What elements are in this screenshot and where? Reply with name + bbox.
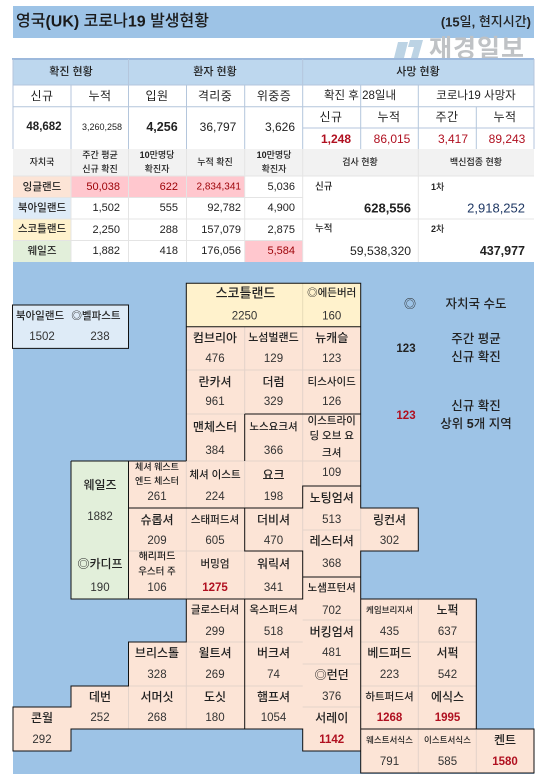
table body: case figures: 누적 <box>89 89 111 103</box>
regional table rows: 2,875 <box>267 224 295 236</box>
regional table rows: 59,538,320 <box>350 244 411 258</box>
table header: group titles <box>12 58 534 85</box>
regional table rows <box>13 176 525 262</box>
panel: Wales: ◎카디프 <box>77 557 123 571</box>
regional table rows: 418 <box>160 245 178 257</box>
map: UK tile cartogram <box>12 283 534 773</box>
region tiles: south: 299 <box>205 626 225 638</box>
region tiles: south: 791 <box>380 756 399 768</box>
table body: case figures: 36,797 <box>200 120 237 134</box>
region tiles: midlands: 링컨셔 <box>373 513 406 527</box>
regional table header: 검사 현황 <box>342 156 378 167</box>
tile outlines <box>12 283 534 773</box>
regional table rows: 622 <box>160 181 178 193</box>
panel: Scotland: 160 <box>322 310 341 322</box>
regional table rows: 2,918,252 <box>467 200 525 216</box>
region tiles: midlands: 106 <box>147 582 167 594</box>
region tiles: south: ◎런던 <box>315 668 349 682</box>
map background <box>13 262 534 774</box>
region tiles: midlands: 470 <box>264 535 283 547</box>
region tiles: south: 376 <box>322 691 341 703</box>
panel: Wales: 1882 <box>87 511 113 523</box>
regional table rows: 누적 <box>315 222 332 234</box>
region tiles: south: 브리스톨 <box>135 646 179 660</box>
region tiles: south: 180 <box>205 712 225 724</box>
table body: case figures: 입원 <box>146 89 168 103</box>
region tiles: midlands: 513 <box>322 514 341 526</box>
panel: Northern Ireland: ◎벨파스트 <box>71 310 121 322</box>
legend: top five regions: 신규 확진 <box>451 399 501 413</box>
region tiles: south: 481 <box>322 647 341 659</box>
region tiles: south: 버크셔 <box>257 646 290 660</box>
title bar <box>13 6 534 38</box>
region tiles: midlands: 368 <box>322 558 341 570</box>
region tiles: south: 서퍽 <box>436 646 459 660</box>
regional table header: 신규 확진 <box>82 164 118 174</box>
region tiles: north: 366 <box>264 445 283 457</box>
table body: case figures: 코로나19 사망자 <box>436 89 516 102</box>
regional table header: 주간 평균 <box>82 149 118 160</box>
region tiles: south: 74 <box>267 669 280 681</box>
table body: case figures: 89,243 <box>489 132 526 146</box>
legend <box>396 297 512 431</box>
region tiles: north: 더럼 <box>262 375 285 389</box>
regional table rows: 288 <box>160 224 178 236</box>
legend: top five regions: 상위 5개 지역 <box>440 417 512 431</box>
regional table rows: 1,502 <box>92 202 120 214</box>
table body: case figures: 3,417 <box>438 132 468 146</box>
regional table rows: 신규 <box>315 182 333 192</box>
panel: Northern Ireland <box>12 305 128 348</box>
panel: Scotland: 2250 <box>232 310 257 322</box>
region tiles: north: 컴브리아 <box>193 331 237 345</box>
region tiles: south: 268 <box>147 712 167 724</box>
regional table rows: 북아일랜드 <box>18 201 66 214</box>
table body: case figures: 격리중 <box>198 89 232 103</box>
region tiles: south: 윌트셔 <box>198 645 232 660</box>
region tiles: midlands: 노팅엄셔 <box>310 491 354 505</box>
region tiles: south <box>31 603 518 768</box>
table header: group titles: 사망 현황 <box>396 65 440 78</box>
regional table rows: 176,056 <box>201 245 241 257</box>
watermark: newspaper logo: 재경일보 <box>429 35 525 63</box>
regional table rows: 628,556 <box>364 200 411 216</box>
panel: Scotland: ◎에든버러 <box>307 287 356 299</box>
table body: case figures: 누적 <box>378 110 400 124</box>
table body: case figures: 1,248 <box>321 132 351 146</box>
title bar: 영국(UK) 코로나19 발생현황 <box>16 12 209 30</box>
regional table rows: 1,882 <box>92 245 120 257</box>
regional table header <box>13 149 534 176</box>
region tiles: south: 1268 <box>377 712 403 724</box>
table body: case figures: 신규 <box>31 89 53 103</box>
panel: Wales <box>71 461 128 599</box>
regional table rows: 5,584 <box>267 245 295 257</box>
regional table header: 10만명당 <box>140 149 174 160</box>
region tiles: north: 딩 오브 요 <box>309 430 354 442</box>
region tiles: north: 961 <box>205 396 225 408</box>
legend: weekly average: 주간 평균 <box>451 332 501 346</box>
panel: England <box>13 327 534 773</box>
region tiles: south: 글로스터셔 <box>191 604 239 616</box>
table body: case figures: 누적 <box>494 110 516 124</box>
regional table rows: 2,250 <box>92 224 120 236</box>
region tiles: midlands: 198 <box>264 491 283 503</box>
region tiles: north: 129 <box>264 353 283 365</box>
region tiles: north: 123 <box>322 353 341 365</box>
region tiles: north: 노섬벌랜드 <box>248 331 299 344</box>
region tiles: north: 맨체스터 <box>193 420 237 434</box>
region tiles: south: 에식스 <box>431 690 464 704</box>
legend: capital marker <box>404 297 506 311</box>
region tiles: south: 292 <box>32 734 52 746</box>
region tiles: midlands: 702 <box>322 605 341 617</box>
region tiles: midlands: 224 <box>205 491 225 503</box>
region tiles: south: 269 <box>205 669 225 681</box>
region tiles: south: 서레이 <box>315 711 348 725</box>
panel: Wales: 190 <box>90 582 110 594</box>
region tiles: south: 1142 <box>319 734 344 746</box>
region tiles: midlands: 우스터 주 <box>138 566 176 578</box>
region tiles: midlands: 레스터셔 <box>310 534 354 548</box>
region tiles: south: 585 <box>438 756 457 768</box>
title bar: (15일, 현지시간) <box>441 14 531 29</box>
regional table rows: 스코틀랜드 <box>18 223 66 235</box>
region tiles: midlands: 1275 <box>202 582 228 594</box>
region tiles: south: 베드퍼드 <box>367 646 412 660</box>
table grid lines <box>13 59 534 262</box>
region tiles: north: 329 <box>264 396 283 408</box>
table body: case figures: 확진 후 28일내 <box>324 88 396 102</box>
region tiles: south: 223 <box>380 669 399 681</box>
region tiles: south: 옥스퍼드셔 <box>249 604 298 616</box>
region tiles: south: 노퍽 <box>436 603 459 617</box>
region tiles: midlands: 341 <box>264 582 283 594</box>
regional table rows: 1차 <box>431 181 445 192</box>
region tiles: south: 도싯 <box>204 690 226 704</box>
region tiles: south: 켄트 <box>494 733 516 747</box>
regional table header: 확진자 <box>145 164 170 174</box>
region tiles: north: 이스트라이 <box>308 415 356 427</box>
table header: group titles: 확진 현황 <box>49 65 93 78</box>
region tiles: south: 1995 <box>435 712 461 724</box>
regional table rows: 5,036 <box>267 181 295 193</box>
region tiles: midlands: 스태퍼드셔 <box>191 514 239 526</box>
regional table rows: 50,038 <box>86 181 120 193</box>
region tiles: midlands: 요크 <box>262 468 285 482</box>
table header: group titles: 환자 현황 <box>193 65 237 78</box>
table body: case figures: 4,256 <box>146 120 178 134</box>
region tiles: midlands: 261 <box>147 491 167 503</box>
regional table header: 누적 확진 <box>197 156 233 167</box>
region tiles: south: 웨스트서식스 <box>366 735 413 745</box>
legend: capital marker: ◎ <box>404 297 416 311</box>
legend: weekly average: 신규 확진 <box>451 350 501 364</box>
regional table rows: 웨일즈 <box>28 244 57 257</box>
table body: case figures: 3,260,258 <box>82 122 122 132</box>
legend: weekly average <box>396 332 501 364</box>
region tiles: south: 1580 <box>492 756 518 768</box>
panel: Scotland <box>186 283 361 327</box>
table body: case figures: 3,626 <box>265 120 295 134</box>
region tiles: north: 476 <box>205 353 225 365</box>
region tiles: north: 뉴캐슬 <box>315 331 348 345</box>
table body: case figures: 신규 <box>320 110 342 124</box>
region tiles: north: 109 <box>322 467 341 479</box>
region tiles: south: 버킹엄셔 <box>310 625 354 639</box>
table body: case figures: 48,682 <box>26 121 62 133</box>
region tiles: south: 하트퍼드셔 <box>365 690 414 703</box>
regional table rows: 4,900 <box>267 202 295 214</box>
region tiles: south: 637 <box>438 626 457 638</box>
regional table header: 확진자 <box>262 164 287 174</box>
region tiles: north: 노스요크셔 <box>249 421 298 433</box>
regional table rows: 잉글랜드 <box>23 181 62 193</box>
region tiles: south: 542 <box>438 669 457 681</box>
region tiles: south: 435 <box>380 626 399 638</box>
region tiles: midlands: 605 <box>205 535 225 547</box>
region tiles: midlands: 슈롭셔 <box>140 513 174 527</box>
region tiles: midlands <box>135 461 406 617</box>
region tiles: north: 크셔 <box>322 447 341 459</box>
table body: case figures: 주간 <box>436 110 458 124</box>
region tiles: south: 데번 <box>89 690 111 704</box>
region tiles: south: 252 <box>90 712 110 724</box>
region tiles: midlands: 해리퍼드 <box>139 550 175 562</box>
regional table header: 백신접종 현황 <box>450 156 502 167</box>
region tiles: midlands: 209 <box>147 535 167 547</box>
region tiles: south: 1054 <box>261 712 287 724</box>
region tiles: south: 햄프셔 <box>257 689 290 704</box>
legend: capital marker: 자치국 수도 <box>446 297 506 311</box>
region tiles: south: 콘월 <box>31 711 53 725</box>
legend: top five regions: 123 <box>396 410 416 422</box>
regional table rows: 157,079 <box>201 224 241 236</box>
legend: weekly average: 123 <box>396 343 416 355</box>
region tiles: midlands: 워릭셔 <box>257 557 290 571</box>
panel: Northern Ireland: 북아일랜드 <box>16 309 64 322</box>
region tiles: north: 티스사이드 <box>308 376 356 388</box>
region tiles: south: 518 <box>264 626 283 638</box>
panel: Scotland: 스코틀랜드 <box>216 286 275 300</box>
table body: case figures: 86,015 <box>374 132 411 146</box>
region tiles: midlands: 체셔 이스트 <box>189 469 241 481</box>
regional table rows: 2차 <box>431 223 445 234</box>
summary table <box>12 58 534 262</box>
panel: Northern Ireland: 1502 <box>29 331 55 343</box>
region tiles: south: 서머싯 <box>140 690 174 704</box>
region tiles: midlands: 302 <box>380 535 399 547</box>
legend: top five regions <box>396 399 512 431</box>
region tiles: south: 이스트서식스 <box>424 735 471 745</box>
tile grid lines <box>128 327 476 773</box>
region tiles: south: 케임브리지셔 <box>366 605 413 615</box>
region tiles: north: 384 <box>205 445 225 457</box>
table body: case figures <box>26 88 526 146</box>
region tiles: midlands: 체셔 웨스트 <box>135 461 179 472</box>
region tiles: midlands: 버밍엄 <box>201 557 229 570</box>
region tiles: south: 328 <box>147 669 167 681</box>
regional table header: 10만명당 <box>257 149 291 160</box>
regional table header: 자치국 <box>30 156 54 167</box>
regional table rows: 92,782 <box>207 202 241 214</box>
region tiles: midlands: 엔드 체스터 <box>135 475 179 486</box>
regional table rows: 2,834,341 <box>196 182 241 192</box>
regional table rows: 437,977 <box>480 244 525 258</box>
regional table rows: 555 <box>160 202 178 214</box>
table body: case figures: 위중증 <box>257 89 291 103</box>
region tiles: north: 란카셔 <box>198 375 232 389</box>
panel: Northern Ireland: 238 <box>90 331 110 343</box>
panel: Wales: 웨일즈 <box>83 478 117 492</box>
region tiles: midlands: 노샘프턴셔 <box>308 581 356 594</box>
region tiles: north: 126 <box>322 396 341 408</box>
region tiles: midlands: 더비셔 <box>257 513 290 527</box>
region tiles: north <box>193 331 356 479</box>
